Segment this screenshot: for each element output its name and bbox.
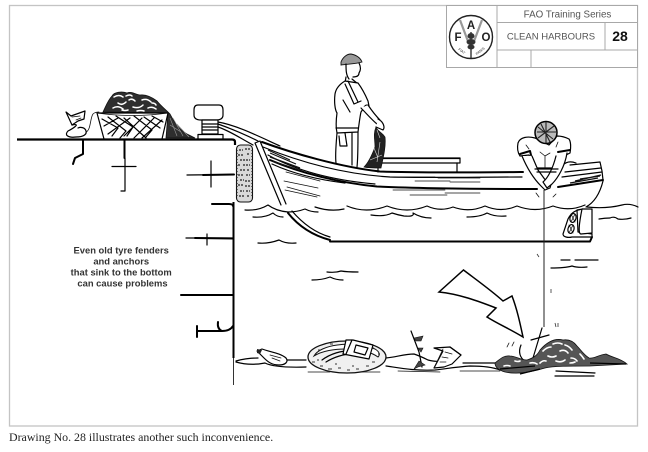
head: [535, 122, 557, 144]
quay wall with cracks: [17, 140, 235, 385]
standing fisherman: [335, 54, 385, 168]
boat hull: [258, 141, 603, 212]
arms and hands: [522, 156, 552, 190]
water surface waves: [245, 204, 638, 280]
icon: FAO logo: PANIS: [475, 46, 486, 56]
arms: [361, 105, 380, 124]
sunken old tyre: [308, 340, 386, 373]
net and rubbish pile: [495, 339, 627, 374]
bollard: [194, 105, 223, 139]
callout text: can cause problems: [77, 278, 168, 288]
sunken branch: [411, 331, 425, 369]
sunken bottle: [257, 349, 287, 365]
highlight arrow: [439, 270, 523, 337]
series title: FAO Training Series: [524, 10, 611, 20]
tyre fender on wall: [236, 145, 252, 202]
rope tag on quay: [66, 111, 99, 137]
header box: FAO Training Series: [446, 6, 638, 68]
head and cap: [341, 54, 362, 65]
line marks: [537, 254, 558, 327]
sunken anchor: [507, 328, 549, 361]
booklet title: CLEAN HARBOURS: [507, 32, 595, 42]
icon: FAO logo: F: [454, 32, 462, 44]
bench: [377, 158, 460, 172]
callout text: and anchors: [93, 256, 149, 266]
fishing line: [543, 190, 545, 327]
stem post: [255, 141, 286, 205]
boat: [255, 141, 603, 242]
callout text: Even old tyre fenders: [74, 244, 169, 256]
drawing number: 28: [612, 28, 628, 44]
icon: FAO logo: [450, 16, 492, 58]
mooring ropes: [218, 122, 280, 146]
sunken box: [434, 347, 461, 368]
torso: [518, 136, 571, 168]
basket with fishing net: [97, 92, 195, 139]
icon: FAO logo: FIAT: [457, 47, 466, 56]
legs: [336, 132, 358, 167]
callout text: that sink to the bottom: [71, 266, 172, 278]
icon: FAO logo: A: [467, 20, 475, 32]
rudder: [563, 209, 592, 237]
keel: [288, 213, 330, 240]
icon: FAO logo: O: [482, 32, 491, 44]
sunken bucket: [343, 340, 373, 359]
torso: [335, 81, 369, 133]
bending fisherman: [518, 122, 571, 197]
held net: [364, 127, 385, 168]
seabed with sunken debris: [236, 354, 595, 376]
caption: Drawing No. 28 illustrates another such inconvenience.: [9, 430, 273, 444]
